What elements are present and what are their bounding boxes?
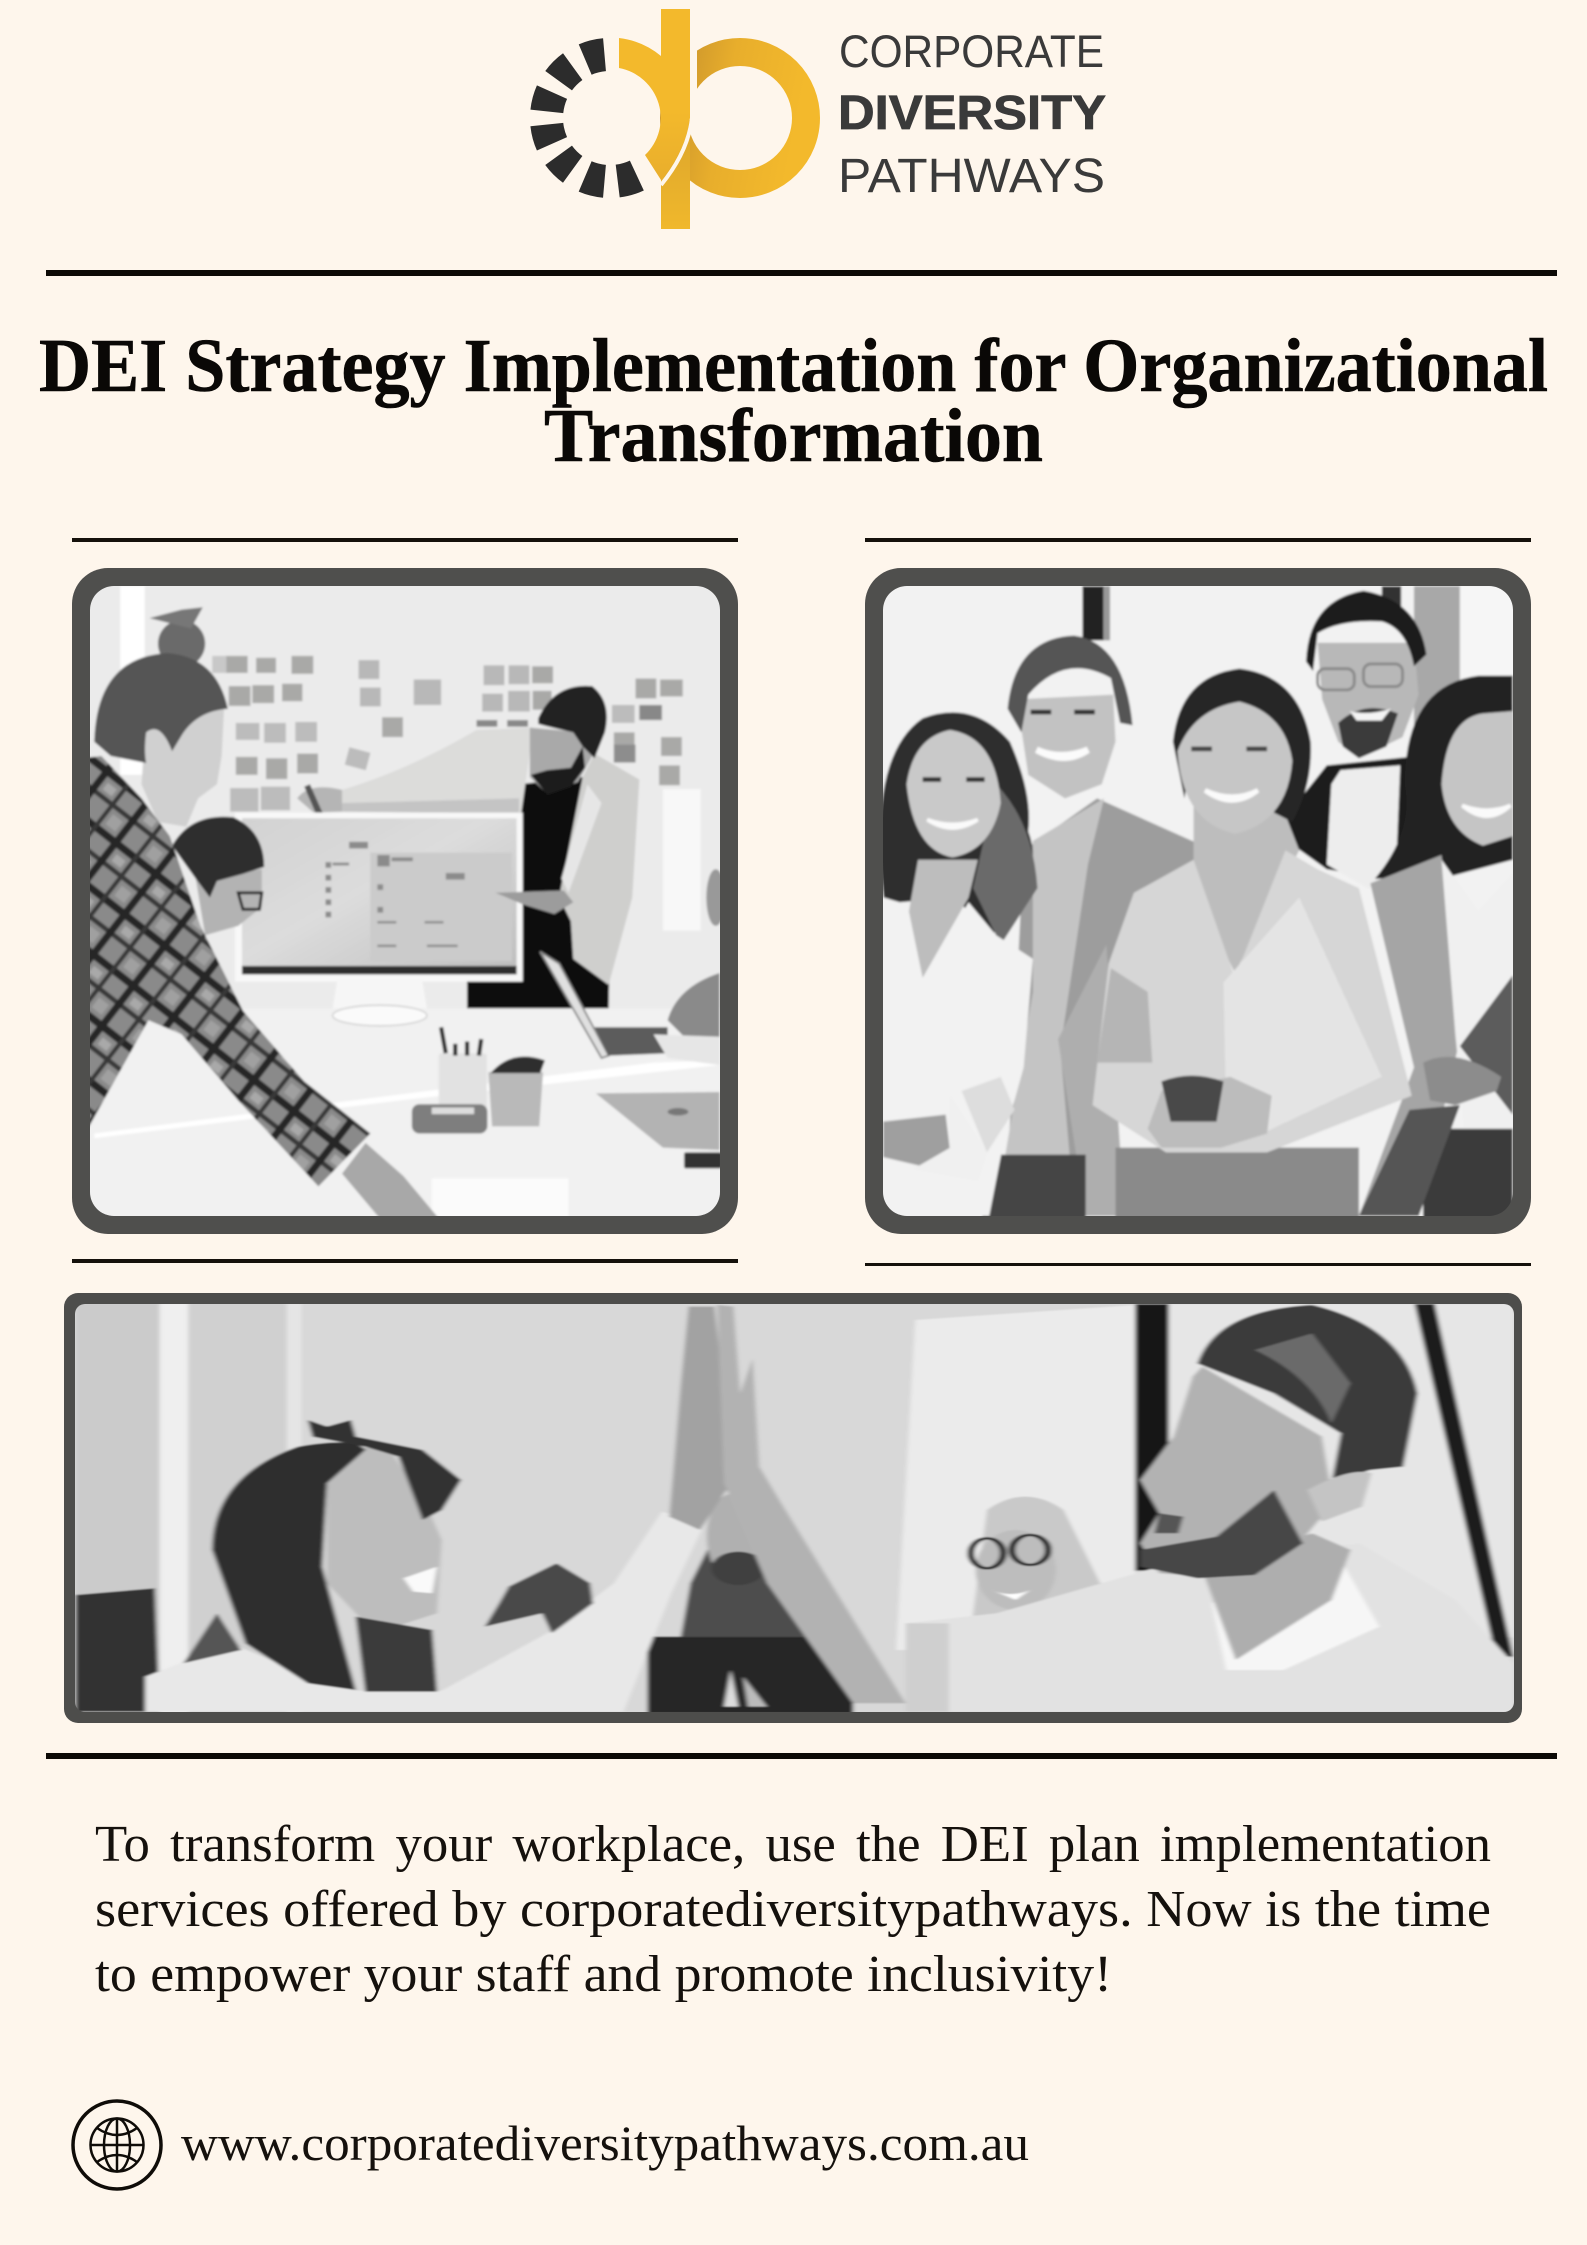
logo wordmark: CORPORATE — [839, 26, 1104, 77]
plant — [485, 1563, 593, 1633]
man's shirt — [928, 1568, 1511, 1711]
icon: gold dp monogram — [619, 9, 806, 229]
woman — [145, 1512, 705, 1712]
text block: call to action: services offered by corporatediversitypathways. Now is the time — [95, 1881, 1491, 1938]
title: Transformation — [544, 394, 1043, 478]
logo: Corporate Diversity Pathways — [521, 9, 1106, 229]
logo wordmark: DIVERSITY — [838, 87, 1106, 140]
text block: call to action: to empower your staff and promote inclusivity! — [95, 1946, 1112, 2003]
text block: call to action: To transform your workplace, use the DEI plan implementation — [95, 1816, 1491, 1873]
logo wordmark: PATHWAYS — [838, 150, 1105, 203]
logo wordmark — [838, 26, 1106, 203]
icon: dark ring segments — [521, 29, 699, 207]
panel: photo of smiling team — [865, 568, 1531, 1234]
title — [39, 324, 1548, 478]
text block: call to action — [95, 1816, 1491, 2003]
man's head — [1140, 1367, 1333, 1578]
website url: www.corporatediversitypathways.com.au — [181, 2115, 1029, 2171]
panel: photo of team meeting at monitor — [72, 568, 738, 1234]
icon: globe in circle — [73, 2101, 161, 2189]
raised arms and hands — [669, 1307, 731, 1530]
panel: photo of high five — [64, 1293, 1523, 1723]
title: DEI Strategy Implementation for Organizational — [39, 324, 1548, 408]
